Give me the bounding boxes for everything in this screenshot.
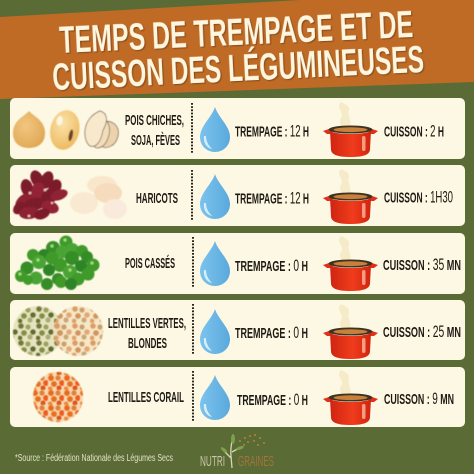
- label: lentilles vertes, blondes: [108, 315, 186, 352]
- label: lentilles vertes, blondes: BLONDES: [128, 335, 167, 352]
- logo: nutri graines: NUTRI: [200, 453, 225, 470]
- source note: *Source : Fédération Nationale des Légumes Secs: [15, 453, 173, 464]
- logo: nutri graines: [200, 434, 274, 470]
- icon: water drop: [200, 309, 230, 354]
- icon: chickpea: [13, 111, 45, 148]
- icon: water drop: [200, 107, 230, 152]
- title banner: [0, 0, 474, 99]
- logo: nutri graines: GRAINES: [238, 453, 274, 470]
- icon: pot: [323, 102, 378, 157]
- label: lentilles vertes, blondes: LENTILLES VERTES,: [108, 315, 186, 332]
- icon: pot: [323, 304, 378, 359]
- icon: blond lentils: [53, 306, 103, 356]
- trempage: TREMPAGE : 0 H: [235, 323, 308, 342]
- panel: pois cassés: [10, 233, 465, 294]
- panel: pois cassés: POIS CASSÉS: [125, 255, 175, 272]
- icon: water drop: [200, 174, 230, 219]
- panel: lentilles vertes, blondes: [10, 300, 465, 360]
- icon: white beans: [70, 176, 127, 219]
- icon: fava beans: [85, 111, 118, 148]
- icon: pot: [323, 169, 378, 224]
- label: pois chiches, soja, fèves: [125, 112, 184, 149]
- icon: water drop: [200, 375, 230, 420]
- title: [51, 4, 425, 99]
- icon: red kidney beans: [11, 168, 69, 221]
- label: pois chiches, soja, fèves: POIS CHICHES,: [125, 112, 184, 129]
- panel: lentilles corail: [10, 367, 465, 427]
- label: pois chiches, soja, fèves: SOJA, FÈVES: [131, 132, 180, 149]
- cuisson: CUISSON : 25 MN: [383, 322, 461, 341]
- trempage: TREMPAGE : 12 H: [235, 122, 309, 140]
- cuisson: CUISSON : 2 H: [384, 122, 444, 140]
- cuisson: CUISSON : 9 MN: [384, 389, 454, 408]
- cuisson: CUISSON : 35 MN: [383, 255, 461, 274]
- panel: haricots: [10, 165, 465, 226]
- trempage: TREMPAGE : 0 H: [235, 256, 308, 275]
- trempage: TREMPAGE : 12 H: [235, 188, 309, 208]
- panel: pois chiches, soja, fèves: [10, 98, 465, 159]
- icon: pot: [323, 370, 378, 425]
- icon: coral lentils: [33, 372, 83, 422]
- icon: green lentils: [13, 306, 63, 356]
- label: lentilles corail: LENTILLES CORAIL: [108, 389, 184, 406]
- icon: soybean: [46, 107, 83, 153]
- icon: pot: [323, 236, 378, 291]
- icon: water drop: [200, 241, 230, 286]
- icon: green split peas: [15, 236, 100, 290]
- label: haricots: HARICOTS: [136, 190, 178, 207]
- cuisson: CUISSON : 1H30: [384, 188, 453, 206]
- trempage: TREMPAGE : 0 H: [237, 390, 308, 409]
